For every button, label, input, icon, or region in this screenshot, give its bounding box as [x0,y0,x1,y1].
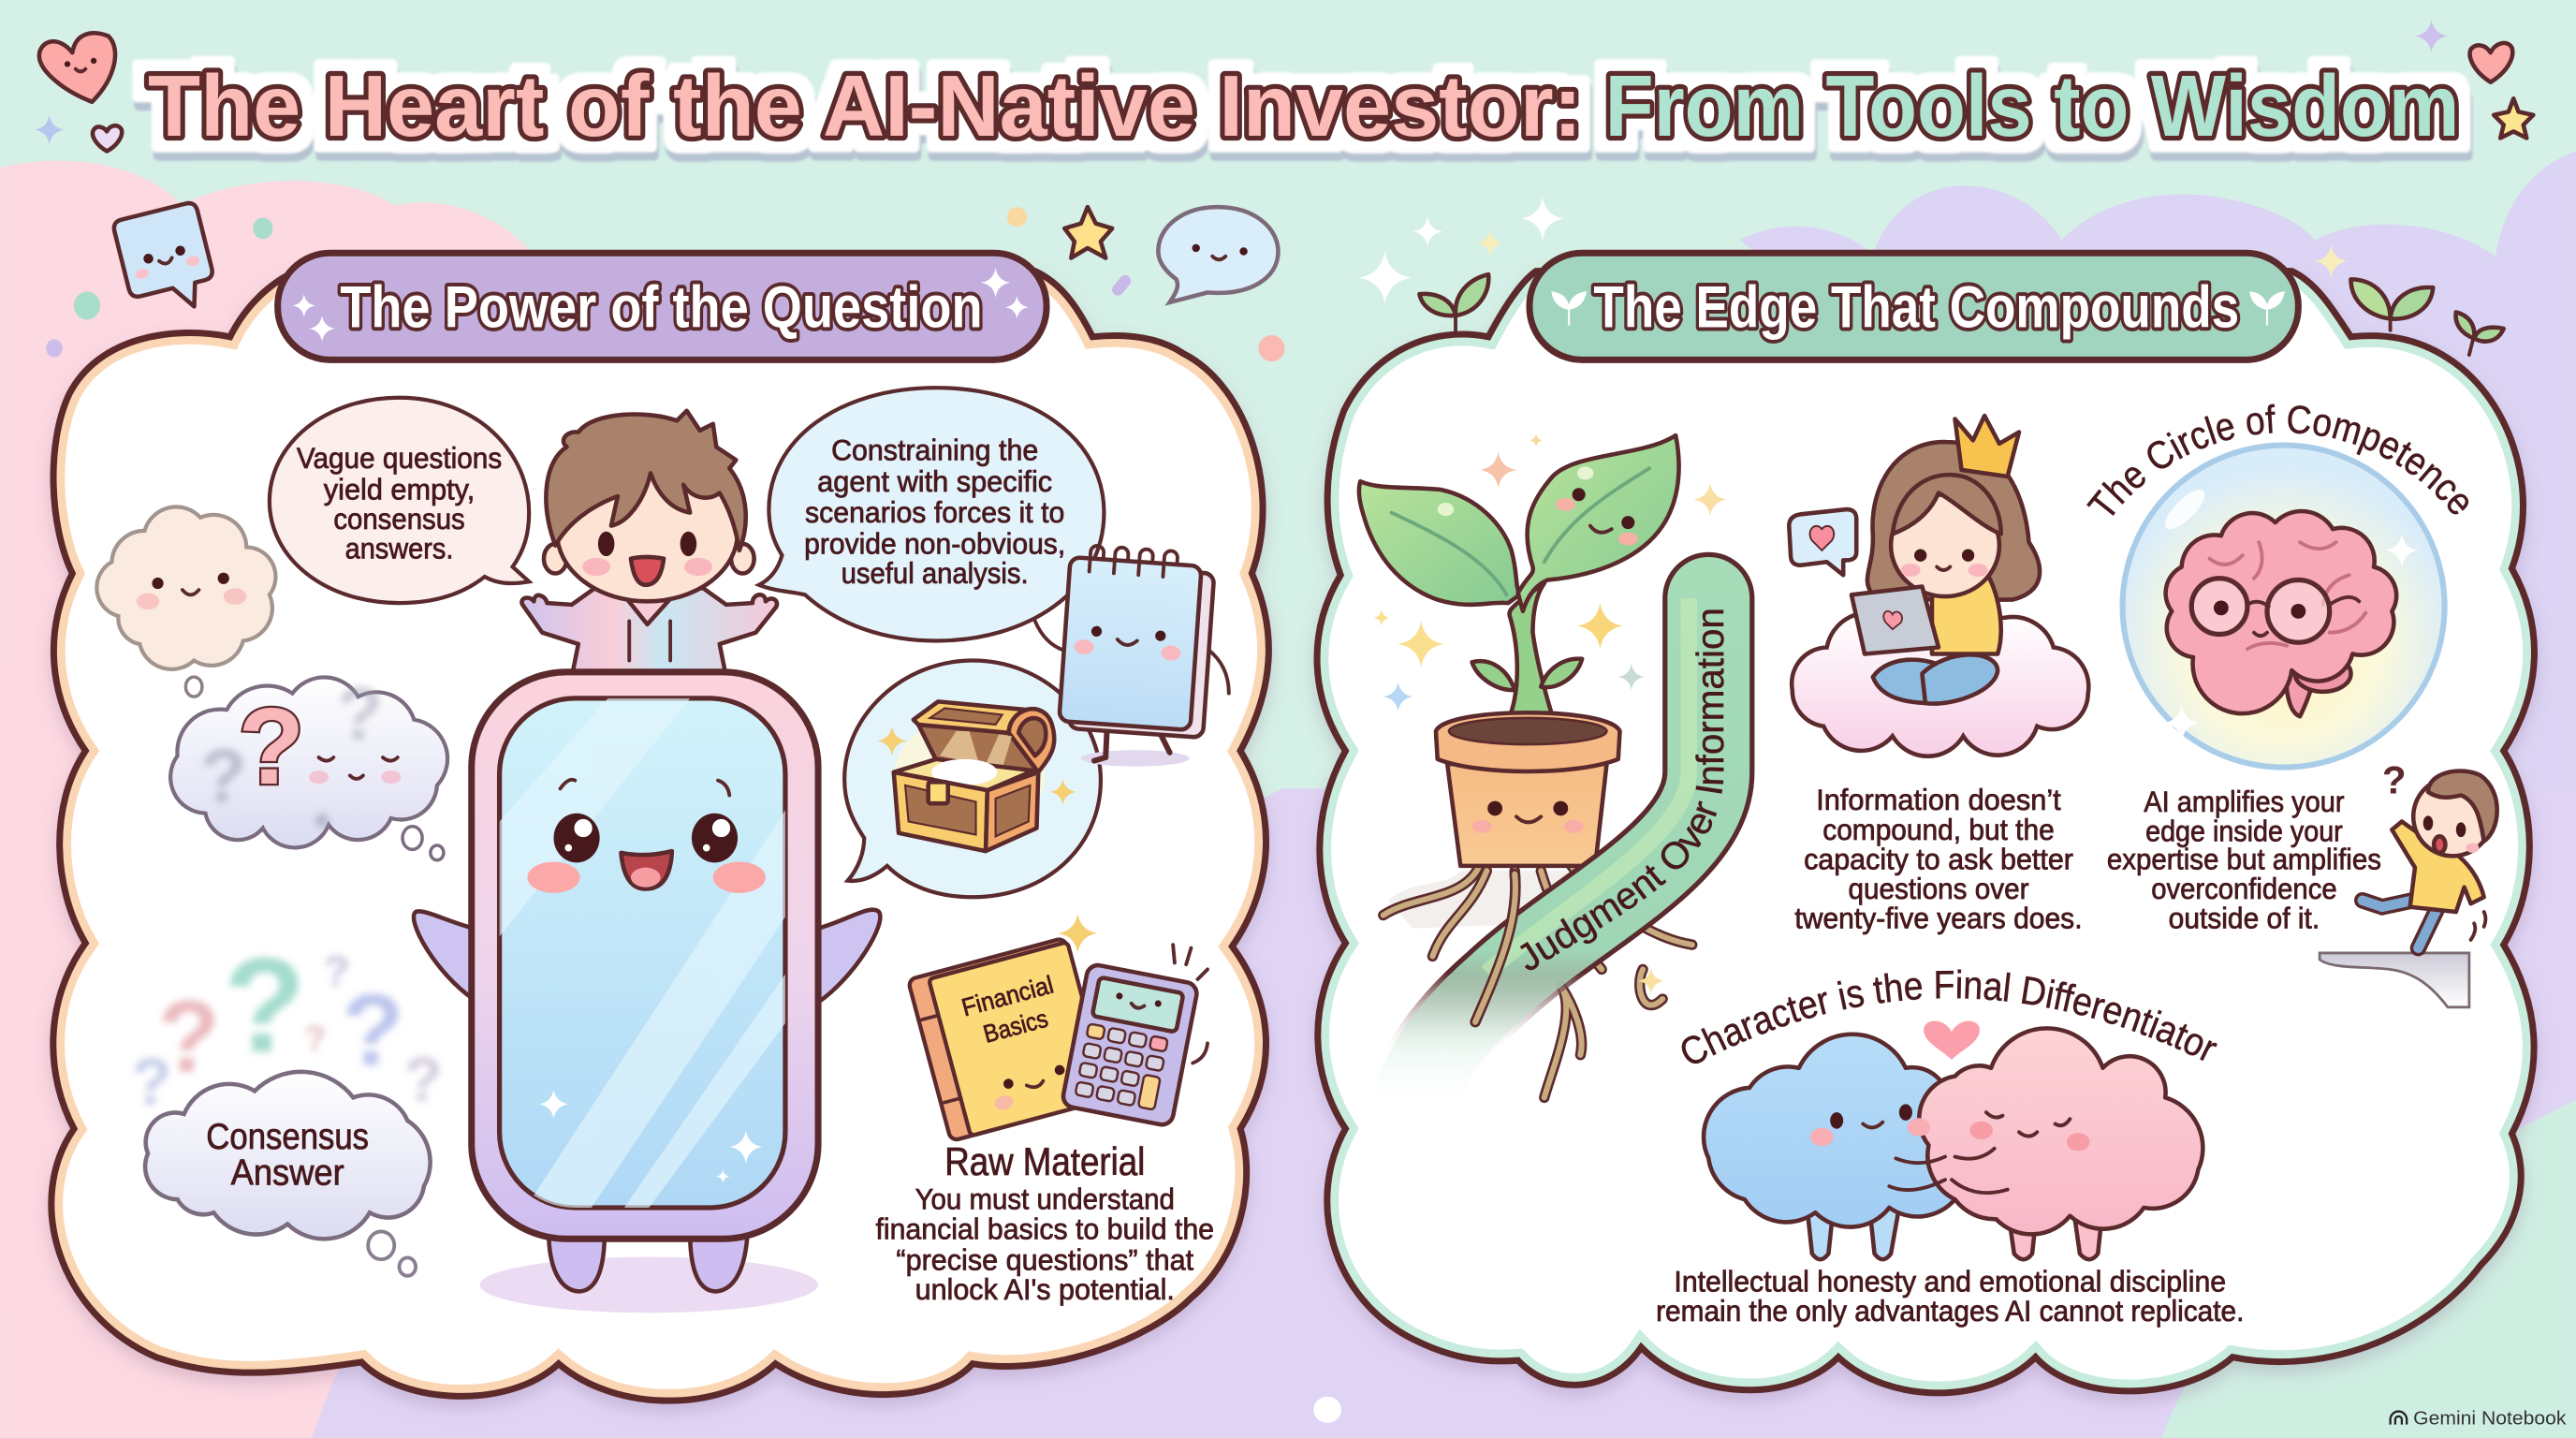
character: notepad [1035,544,1229,767]
character: boy at cliff edge [2320,758,2497,1007]
watermark: gemini notebook: Gemini Notebook [2413,1409,2567,1430]
icon: heart right [2470,43,2512,82]
text block: raw material: unlock AI's potential. [915,1272,1175,1306]
text block: intellectual honesty: Intellectual honesty and emotional discipline [1674,1264,2226,1298]
text block: raw material: financial basics to build the [875,1211,1214,1245]
text block: information doesn't compound: compound, but the [1822,813,2055,846]
characters: hugging clouds [1704,1021,2203,1259]
text block: ai amplifies: AI amplifies your [2144,785,2344,818]
speech bubble: constraining [759,388,1104,640]
text block: ai amplifies: edge inside your [2145,814,2343,848]
heading pill right [1530,253,2298,360]
text block: ai amplifies: overconfidence [2151,872,2337,905]
speech bubble: vague questions: yield empty, [324,473,475,506]
speech bubble: constraining: provide non-obvious, [804,526,1065,560]
title: From Tools to Wisdom [1605,57,2459,154]
heading pill left: The Power of the Question [340,274,983,340]
thought cloud with question marks: ? [337,672,383,756]
speech bubble: vague questions: answers. [345,532,453,565]
character: smiling mirror [414,672,880,1313]
icon: brain in circle of competence [2123,446,2445,768]
icon: star [1064,207,1112,258]
character: boy in hoodie [521,411,777,677]
icon: financial basics book: Financial [959,971,1057,1021]
text block: information doesn't compound [1794,783,2083,935]
character: beige cloud [96,506,275,669]
heading pill left [278,253,1046,360]
icon: square speech face [112,201,220,321]
icon: financial basics book [908,914,1109,1141]
text block: ai amplifies: expertise but amplifies [2107,842,2381,875]
ribbon: judgment over information: Judgment Over Information [1520,609,1724,970]
panel: the edge that compounds [1308,249,2542,1409]
text block: ai amplifies [2107,785,2381,935]
speech bubble: constraining: agent with specific [817,464,1052,498]
speech bubble: vague questions: consensus [333,502,465,536]
blurred question marks: ? [304,1020,326,1060]
dots [46,207,1341,1423]
blurred question marks: ? [224,931,306,1080]
text block: raw material: You must understand [915,1182,1175,1216]
speech bubble: treasure chest [844,661,1101,897]
title [148,57,2459,154]
consensus answer cloud: Consensus [206,1117,369,1157]
thought dots top [185,677,202,697]
speech bubble: vague questions: Vague questions [297,441,502,475]
text block: information doesn't compound: Information doesn’t [1816,783,2061,816]
icon: sparkle lavender [2415,20,2448,52]
text block: information doesn't compound: twenty-five years does. [1794,902,2083,935]
sparkles [1358,198,2348,304]
icon: round speech bubble [1158,207,1278,302]
text block: intellectual honesty [1656,1264,2244,1328]
speech bubble: constraining: scenarios forces it to [805,495,1064,529]
icon: smiling heart [39,33,115,102]
text block: raw material: “precise questions” that [896,1243,1193,1277]
character: boy at cliff edge: ? [2382,758,2407,802]
curved label: character is the final differentiator: Character is the Final Differentiator [1673,962,2224,1076]
blurred question marks: ? [324,947,350,995]
icon: potted plant [1359,433,1727,1097]
panel: the power of the question [51,253,1268,1401]
icon: sparkle [35,115,65,144]
blurred question marks [131,931,443,1118]
consensus answer cloud: Answer [231,1152,344,1193]
icon: calculator [1061,945,1208,1126]
blurred question marks: ? [342,973,404,1087]
panel body right [1317,271,2535,1393]
speech bubble: constraining: Constraining the [831,433,1038,466]
icon: small heart [93,125,122,151]
speech bubble: vague questions [270,398,529,603]
heading pill right: The Edge That Compounds [1593,274,2239,340]
blurred question marks: ? [404,1046,443,1115]
icon: sprouts [1419,274,2504,355]
thought cloud with question marks: ? [239,685,304,807]
curved label: the circle of competence: The Circle of Competence [2086,404,2469,516]
speech bubble: constraining: useful analysis. [842,556,1029,590]
panel body left [51,271,1268,1401]
consensus answer cloud [145,1072,431,1276]
thought cloud with question marks: ? [200,734,246,818]
text block: raw material [875,1139,1214,1306]
blurred question marks: ? [131,1044,171,1118]
blurred question marks: ? [158,979,220,1093]
icon: star right [2494,98,2533,138]
text block: ai amplifies: outside of it. [2169,902,2320,935]
text block: information doesn't compound: questions over [1848,872,2029,905]
thought cloud with question marks: ● [313,800,332,837]
character: girl on cloud [1789,416,2088,756]
thought cloud with question marks [170,672,447,860]
ribbon: judgment over information [1405,598,1732,1134]
text block: raw material: Raw Material [944,1139,1145,1183]
text block: information doesn't compound: capacity to ask better [1804,842,2073,875]
icon: financial basics book: Basics [980,1005,1051,1049]
title: The Heart of the AI-Native Investor: [148,57,1582,154]
text block: intellectual honesty: remain the only advantages AI cannot replicate. [1656,1294,2244,1328]
